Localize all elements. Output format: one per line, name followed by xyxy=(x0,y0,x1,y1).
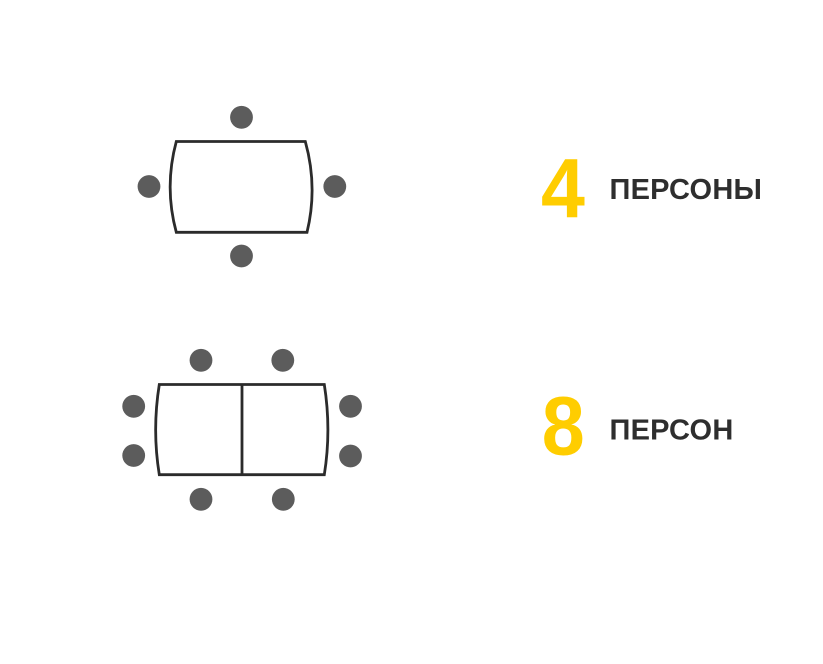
label: 8 people xyxy=(542,380,734,473)
diagram: table for 4 people xyxy=(138,106,346,267)
number 4: 4 xyxy=(541,142,585,236)
text: persons: ПЕРСОН xyxy=(610,414,734,446)
label: 4 people xyxy=(541,142,762,236)
diagram: table for 8 people xyxy=(122,349,362,511)
icon: seats xyxy=(122,349,362,511)
number 8: 8 xyxy=(542,380,585,473)
icon: seats xyxy=(138,106,346,267)
icon: joined table top xyxy=(156,384,328,475)
icon: table top xyxy=(170,142,312,232)
text: persons: ПЕРСОНЫ xyxy=(610,174,762,206)
